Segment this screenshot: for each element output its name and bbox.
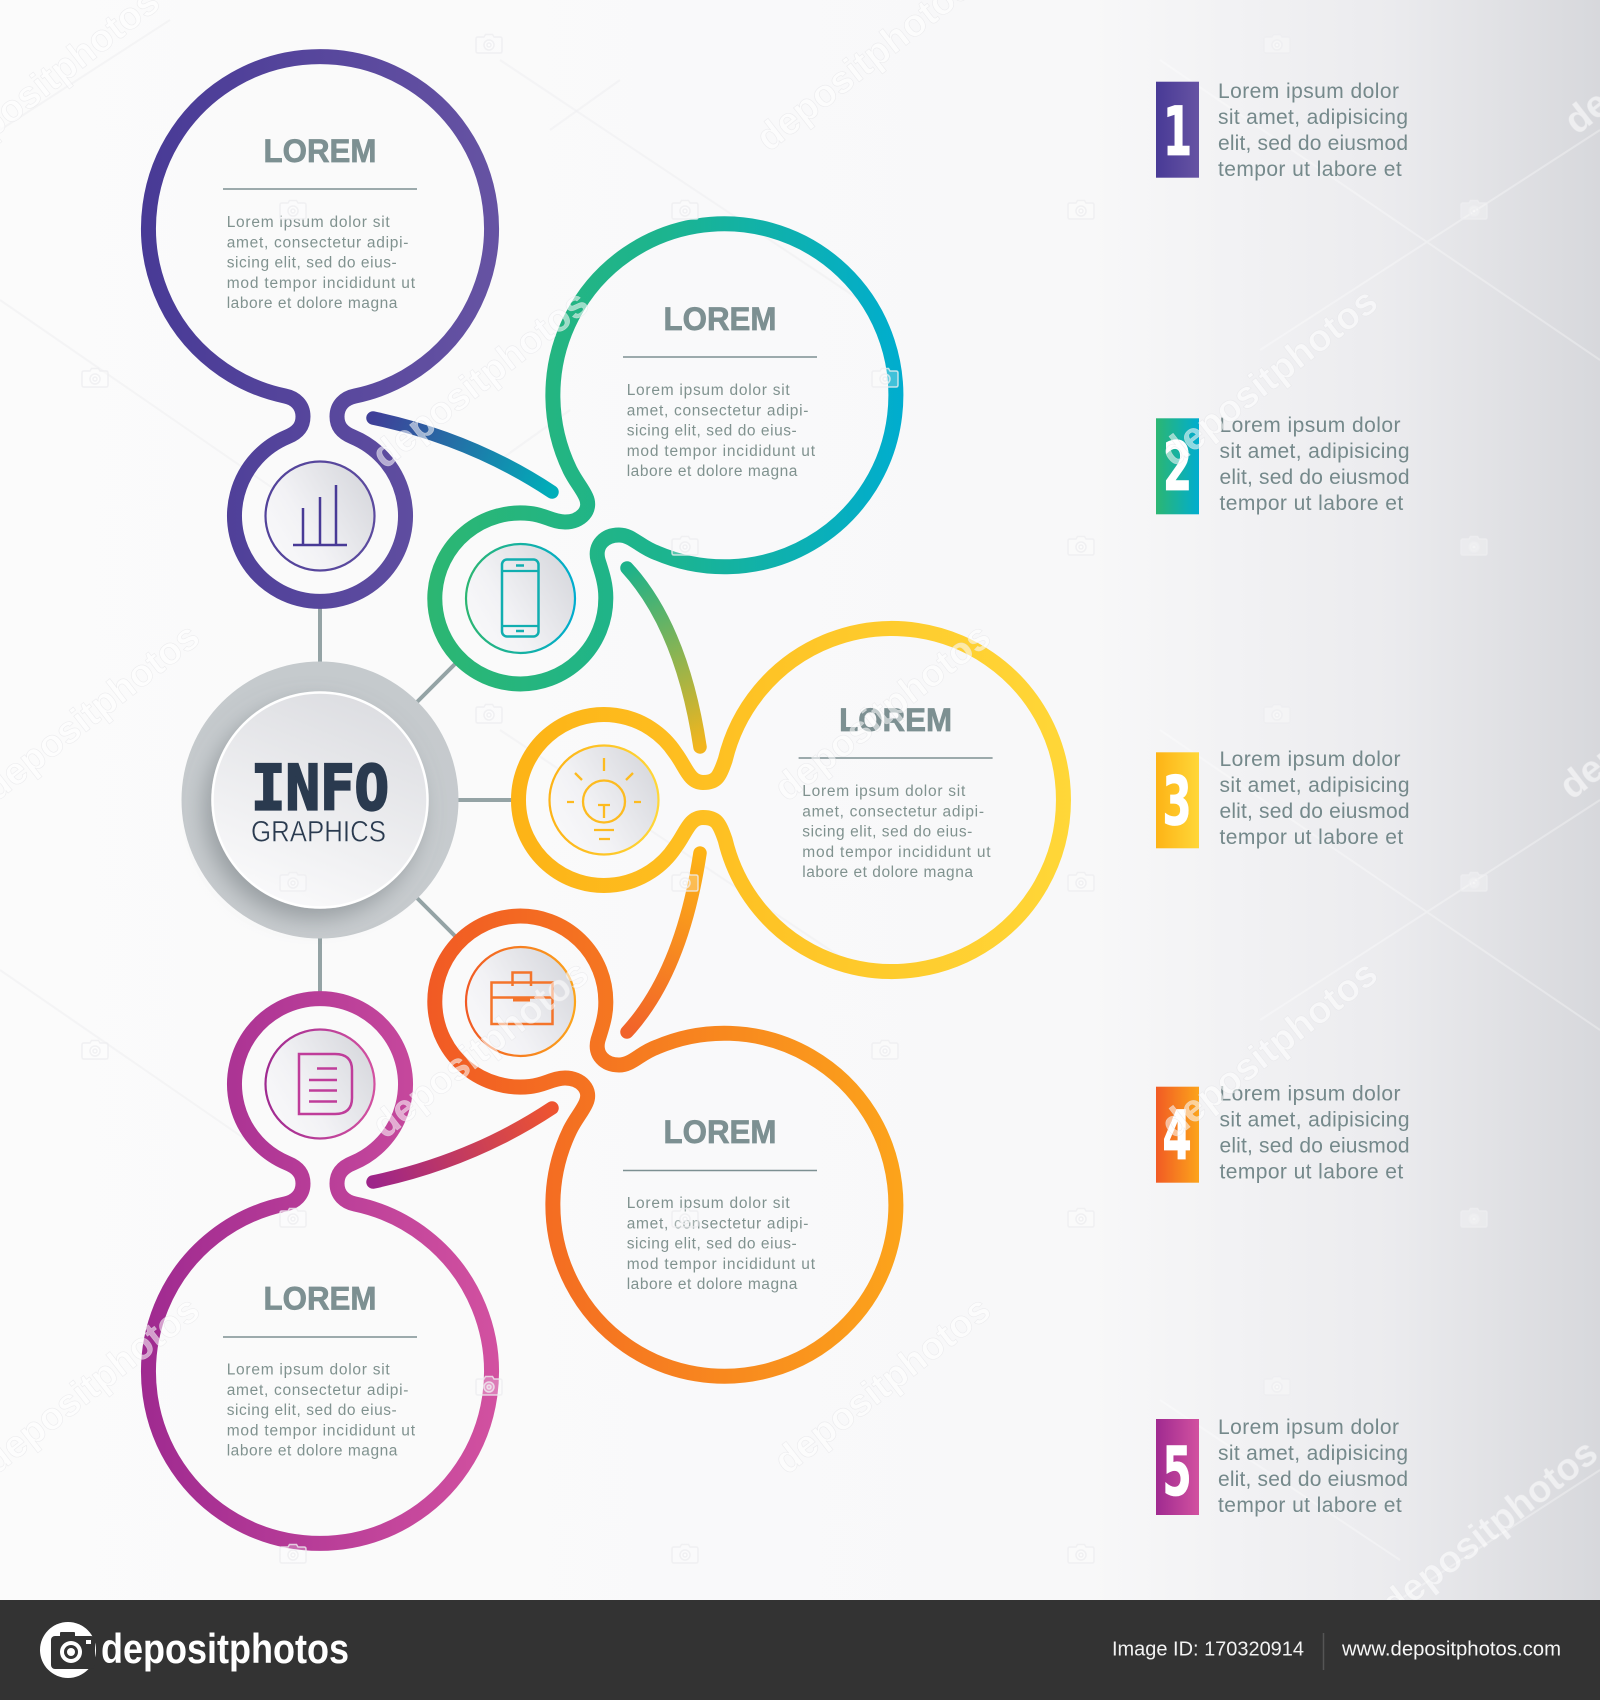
legend item 3 (1156, 748, 1410, 849)
center badge (182, 662, 458, 938)
body text: sicing elit, sed do eius- (227, 1402, 397, 1419)
text: depositphotos (1154, 952, 1386, 1147)
body text: amet, consectetur adipi- (227, 1382, 408, 1399)
legend item 2 (1156, 414, 1410, 515)
body text: Lorem ipsum dolor sit (627, 382, 790, 399)
text: depositphotos (365, 952, 597, 1147)
icon: light bulb (550, 746, 658, 854)
legend item 1: elit, sed do eiusmod (1218, 132, 1408, 155)
icon: camera logo (40, 1622, 96, 1678)
arrow: yellow to orange (627, 853, 700, 1032)
text: depositphotos (767, 1288, 999, 1483)
legend item 4: tempor ut labore et (1220, 1160, 1403, 1184)
shape 4: orange ring (435, 916, 896, 1376)
legend item 3: Lorem ipsum dolor (1220, 748, 1400, 771)
text block: panel 5 (223, 1280, 417, 1460)
body text: Lorem ipsum dolor sit (227, 1362, 390, 1378)
legend item 3: tempor ut labore et (1220, 826, 1403, 849)
body text (627, 1195, 816, 1293)
body text: labore et dolore magna (227, 1443, 398, 1460)
legend item 1: tempor ut labore et (1218, 158, 1402, 181)
legend item 1: sit amet, adipisicing (1218, 106, 1408, 129)
body text: amet, consectetur adipi- (627, 1215, 808, 1232)
shape 5: magenta ring (148, 999, 491, 1543)
body text: labore et dolore magna (227, 295, 398, 312)
legend item 4: 4 (1162, 1096, 1192, 1176)
body text: mod tempor incididunt ut (627, 1256, 816, 1273)
body text (227, 214, 416, 312)
body text: labore et dolore magna (627, 463, 798, 480)
legend item 1 (1156, 80, 1408, 181)
text: depositphotos (767, 615, 999, 810)
legend item 4: sit amet, adipisicing (1220, 1108, 1410, 1132)
body text: Lorem ipsum dolor sit (227, 214, 390, 231)
body text: Lorem ipsum dolor sit (802, 783, 966, 800)
legend item 2: tempor ut labore et (1220, 492, 1403, 515)
legend item 5: Lorem ipsum dolor (1218, 1416, 1399, 1439)
heading: LOREM (664, 301, 776, 337)
shape 1: purple ring (148, 57, 491, 601)
legend item 4 (1156, 1082, 1410, 1184)
legend item 3: sit amet, adipisicing (1220, 774, 1410, 797)
shape 3: yellow ring (518, 628, 1063, 972)
body text: mod tempor incididunt ut (627, 443, 816, 460)
text: depositphotos (365, 282, 597, 477)
body text: mod tempor incididunt ut (802, 844, 991, 861)
legend item 5: 5 (1162, 1432, 1192, 1512)
icon: phone (466, 544, 575, 653)
body text: sicing elit, sed do eius- (802, 824, 972, 841)
icon: document (266, 1030, 374, 1138)
center subtitle: GRAPHICS: GRAPHICS (251, 816, 386, 848)
logo wordmark: depositphotos (101, 1625, 349, 1672)
body text: mod tempor incididunt ut (227, 275, 416, 292)
legend item 5: elit, sed do eiusmod (1218, 1468, 1408, 1491)
arrow: orange to magenta (373, 1108, 552, 1182)
connector lines (320, 606, 514, 994)
body text: sicing elit, sed do eius- (627, 1236, 797, 1253)
shape 2: teal ring (435, 224, 896, 684)
arrow: teal to yellow (627, 568, 700, 747)
text: depositphotos (1154, 280, 1386, 475)
legend item 2: 2 (1163, 427, 1192, 507)
legend item 4: elit, sed do eiusmod (1220, 1134, 1410, 1158)
legend item 2: sit amet, adipisicing (1220, 440, 1410, 463)
body text: labore et dolore magna (802, 864, 973, 881)
body text: sicing elit, sed do eius- (227, 255, 397, 272)
legend item 1: Lorem ipsum dolor (1218, 80, 1399, 103)
icon: briefcase (466, 947, 575, 1056)
text block: panel 2 (623, 301, 817, 480)
body text: amet, consectetur adipi- (627, 402, 808, 419)
center title: INFO: INFO (251, 752, 389, 824)
body text (802, 783, 991, 881)
legend item 5 (1156, 1416, 1408, 1517)
body text: sicing elit, sed do eius- (627, 423, 797, 440)
legend item 4: Lorem ipsum dolor (1220, 1082, 1400, 1106)
body text (627, 382, 816, 480)
legend item 5: tempor ut labore et (1218, 1494, 1402, 1517)
body text (227, 1362, 416, 1460)
body text: amet, consectetur adipi- (802, 803, 984, 820)
legend item 3: 3 (1162, 762, 1192, 841)
arrow: purple to teal (373, 418, 552, 492)
legend item 2: Lorem ipsum dolor (1220, 414, 1400, 437)
heading: LOREM (664, 1114, 776, 1150)
footer bar (0, 1600, 1600, 1700)
body text: mod tempor incididunt ut (227, 1422, 416, 1440)
text block: panel 1 (223, 133, 417, 312)
icon: bar chart (266, 462, 374, 570)
heading: LOREM (839, 702, 952, 738)
legend item 1: 1 (1163, 92, 1192, 172)
heading: LOREM (264, 133, 376, 169)
heading: LOREM (264, 1280, 376, 1316)
text: depositphotos (1374, 1431, 1600, 1626)
body text: labore et dolore magna (627, 1276, 798, 1293)
site url: www.depositphotos.com (1341, 1638, 1561, 1660)
body text: amet, consectetur adipi- (227, 234, 408, 251)
legend item 2: elit, sed do eiusmod (1220, 466, 1410, 489)
text block: panel 4 (623, 1114, 817, 1293)
text block: panel 3 (799, 702, 993, 881)
legend item 3: elit, sed do eiusmod (1220, 800, 1410, 823)
legend item 5: sit amet, adipisicing (1218, 1442, 1408, 1465)
image id: Image ID: 170320914 (1112, 1638, 1304, 1660)
body text: Lorem ipsum dolor sit (627, 1195, 790, 1212)
